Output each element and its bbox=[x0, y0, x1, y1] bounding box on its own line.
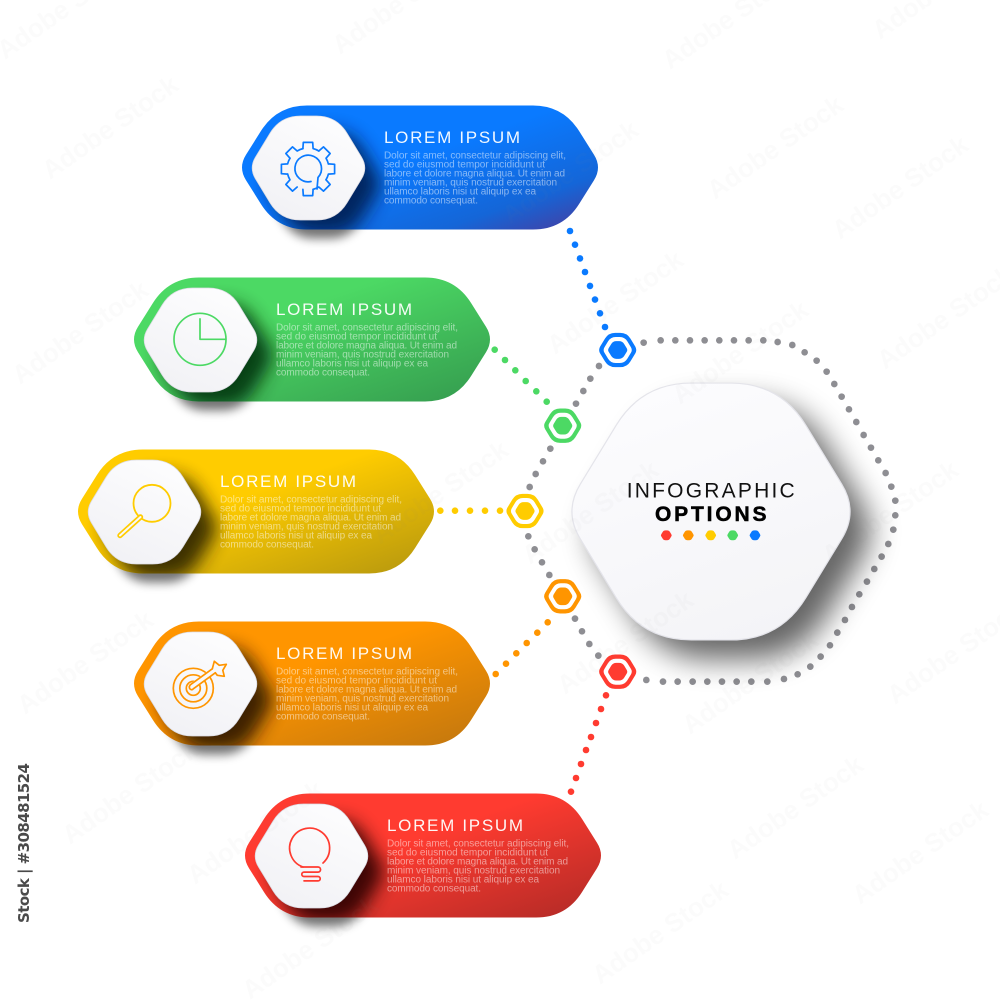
stock watermark pattern: Adobe Stock bbox=[6, 274, 154, 390]
body text: labore et dolore magna aliqua. Ut enim ad bbox=[387, 856, 568, 868]
title: LOREM IPSUM bbox=[276, 644, 412, 663]
body text: labore et dolore magna aliqua. Ut enim ad bbox=[276, 684, 457, 696]
body text: minim veniam, quis nostrud exercitation bbox=[384, 178, 557, 188]
body text: labore et dolore magna aliqua. Ut enim ad bbox=[384, 168, 565, 180]
red connector dots bbox=[568, 692, 609, 795]
body text: labore et dolore magna aliqua. Ut enim ad bbox=[220, 512, 401, 524]
heading: options: OPTIONS bbox=[655, 503, 766, 526]
body text bbox=[276, 666, 458, 722]
stock watermark pattern: Adobe Stock bbox=[586, 874, 734, 990]
panel: central hexagon bbox=[572, 383, 870, 659]
stock watermark pattern: Adobe Stock bbox=[701, 89, 849, 205]
body text: sed do eiusmod tempor incididunt ut bbox=[276, 676, 437, 686]
stock watermark pattern: Adobe Stock bbox=[721, 749, 869, 865]
stock watermark pattern: Adobe Stock bbox=[181, 774, 329, 890]
body text: ullamco laboris nisi ut aliquip ex ea bbox=[220, 530, 372, 542]
body text: minim veniam, quis nostrud exercitation bbox=[387, 866, 560, 876]
colour key dots bbox=[661, 530, 760, 540]
orange connector dots bbox=[492, 619, 551, 677]
stock watermark pattern: Adobe Stock bbox=[826, 129, 974, 245]
node: blue hexagon bbox=[599, 333, 636, 367]
title: LOREM IPSUM bbox=[220, 472, 356, 491]
stock watermark pattern: Adobe Stock bbox=[56, 734, 204, 850]
body text: sed do eiusmod tempor incididunt ut bbox=[387, 848, 548, 858]
icon: light bulb bbox=[290, 828, 330, 881]
blue connector dots bbox=[567, 228, 608, 330]
title: LOREM IPSUM bbox=[384, 128, 520, 147]
icon: gear bbox=[281, 142, 335, 196]
panel: red option bbox=[245, 794, 601, 926]
body text bbox=[387, 838, 569, 894]
body text: Dolor sit amet, consectetur adipiscing elit, bbox=[276, 322, 458, 334]
panel: orange option bbox=[134, 622, 490, 754]
stock watermark pattern: Adobe Stock bbox=[516, 454, 664, 570]
stock id label: Stock | #308481524 bbox=[15, 763, 34, 923]
heading: infographic: INFOGRAPHIC bbox=[627, 479, 795, 502]
body text: ullamco laboris nisi ut aliquip ex ea bbox=[276, 702, 428, 714]
stock watermark pattern: Adobe Stock bbox=[366, 434, 514, 550]
title: LOREM IPSUM bbox=[276, 300, 412, 319]
body text: sed do eiusmod tempor incididunt ut bbox=[220, 504, 381, 514]
body text: Dolor sit amet, consectetur adipiscing elit, bbox=[387, 838, 569, 850]
body text: Dolor sit amet, consectetur adipiscing elit, bbox=[220, 494, 402, 506]
body text: commodo consequat. bbox=[384, 196, 478, 206]
body text: Dolor sit amet, consectetur adipiscing elit, bbox=[384, 150, 566, 162]
body text: commodo consequat. bbox=[387, 884, 481, 894]
body text: ullamco laboris nisi ut aliquip ex ea bbox=[387, 874, 539, 886]
body text: commodo consequat. bbox=[220, 540, 314, 550]
body text: ullamco laboris nisi ut aliquip ex ea bbox=[384, 186, 536, 198]
icon: pie chart bbox=[174, 313, 226, 365]
body text: sed do eiusmod tempor incididunt ut bbox=[384, 160, 545, 170]
stock watermark pattern: Adobe Stock bbox=[551, 584, 699, 700]
body text bbox=[220, 494, 402, 550]
stock watermark pattern: Adobe Stock bbox=[11, 604, 159, 720]
body text: commodo consequat. bbox=[276, 712, 370, 722]
node: yellow hexagon bbox=[506, 494, 544, 528]
yellow connector dots bbox=[437, 507, 503, 514]
stock watermark pattern: Adobe Stock bbox=[666, 294, 814, 410]
body text bbox=[384, 150, 566, 206]
panel: yellow option bbox=[78, 450, 434, 582]
stock watermark pattern: Adobe Stock bbox=[541, 244, 689, 360]
body text: commodo consequat. bbox=[276, 368, 370, 378]
stock watermark pattern: Adobe Stock bbox=[816, 454, 964, 570]
node: red hexagon bbox=[599, 655, 636, 689]
grey dotted hexagon ring bbox=[525, 337, 899, 685]
body text: minim veniam, quis nostrud exercitation bbox=[276, 694, 449, 704]
body text: Dolor sit amet, consectetur adipiscing elit, bbox=[276, 666, 458, 678]
stock watermark pattern: Adobe Stock bbox=[846, 794, 994, 910]
body text bbox=[276, 322, 458, 378]
panel: green option bbox=[134, 278, 490, 410]
stock watermark pattern: Adobe Stock bbox=[496, 114, 644, 230]
body text: minim veniam, quis nostrud exercitation bbox=[276, 350, 449, 360]
body text: minim veniam, quis nostrud exercitation bbox=[220, 522, 393, 532]
green connector dots bbox=[491, 346, 550, 405]
title: LOREM IPSUM bbox=[387, 816, 523, 835]
icon: target bbox=[173, 661, 226, 708]
node: orange hexagon bbox=[544, 579, 581, 613]
panel: blue option bbox=[242, 106, 598, 238]
body text: ullamco laboris nisi ut aliquip ex ea bbox=[276, 358, 428, 370]
body text: labore et dolore magna aliqua. Ut enim ad bbox=[276, 340, 457, 352]
stock watermark pattern: Adobe Stock bbox=[676, 624, 824, 740]
icon: magnifier bbox=[120, 485, 170, 536]
node: green hexagon bbox=[544, 409, 581, 443]
body text: sed do eiusmod tempor incididunt ut bbox=[276, 332, 437, 342]
stock watermark pattern: Adobe Stock bbox=[36, 69, 184, 185]
